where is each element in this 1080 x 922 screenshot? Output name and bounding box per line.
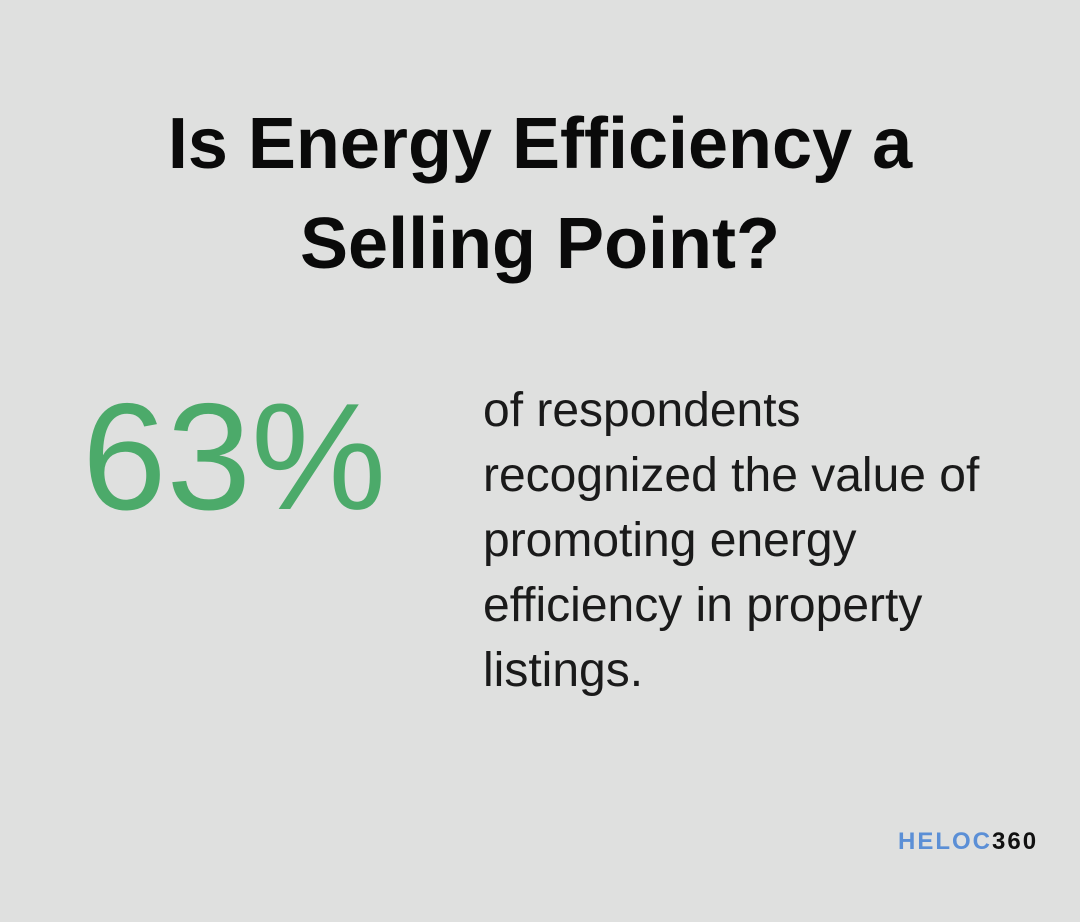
logo: HELOC360 xyxy=(898,828,1038,855)
title: Is Energy Efficiency a xyxy=(168,104,912,184)
stat number: 63% xyxy=(82,372,386,542)
stat description: recognized the value of xyxy=(483,449,979,502)
stat description xyxy=(483,384,980,697)
stat description: of respondents xyxy=(483,384,801,437)
title xyxy=(168,104,913,284)
stat description: efficiency in property xyxy=(483,579,922,632)
stat description: listings. xyxy=(483,644,643,697)
title: Selling Point? xyxy=(300,204,780,284)
stat description: promoting energy xyxy=(483,514,857,567)
